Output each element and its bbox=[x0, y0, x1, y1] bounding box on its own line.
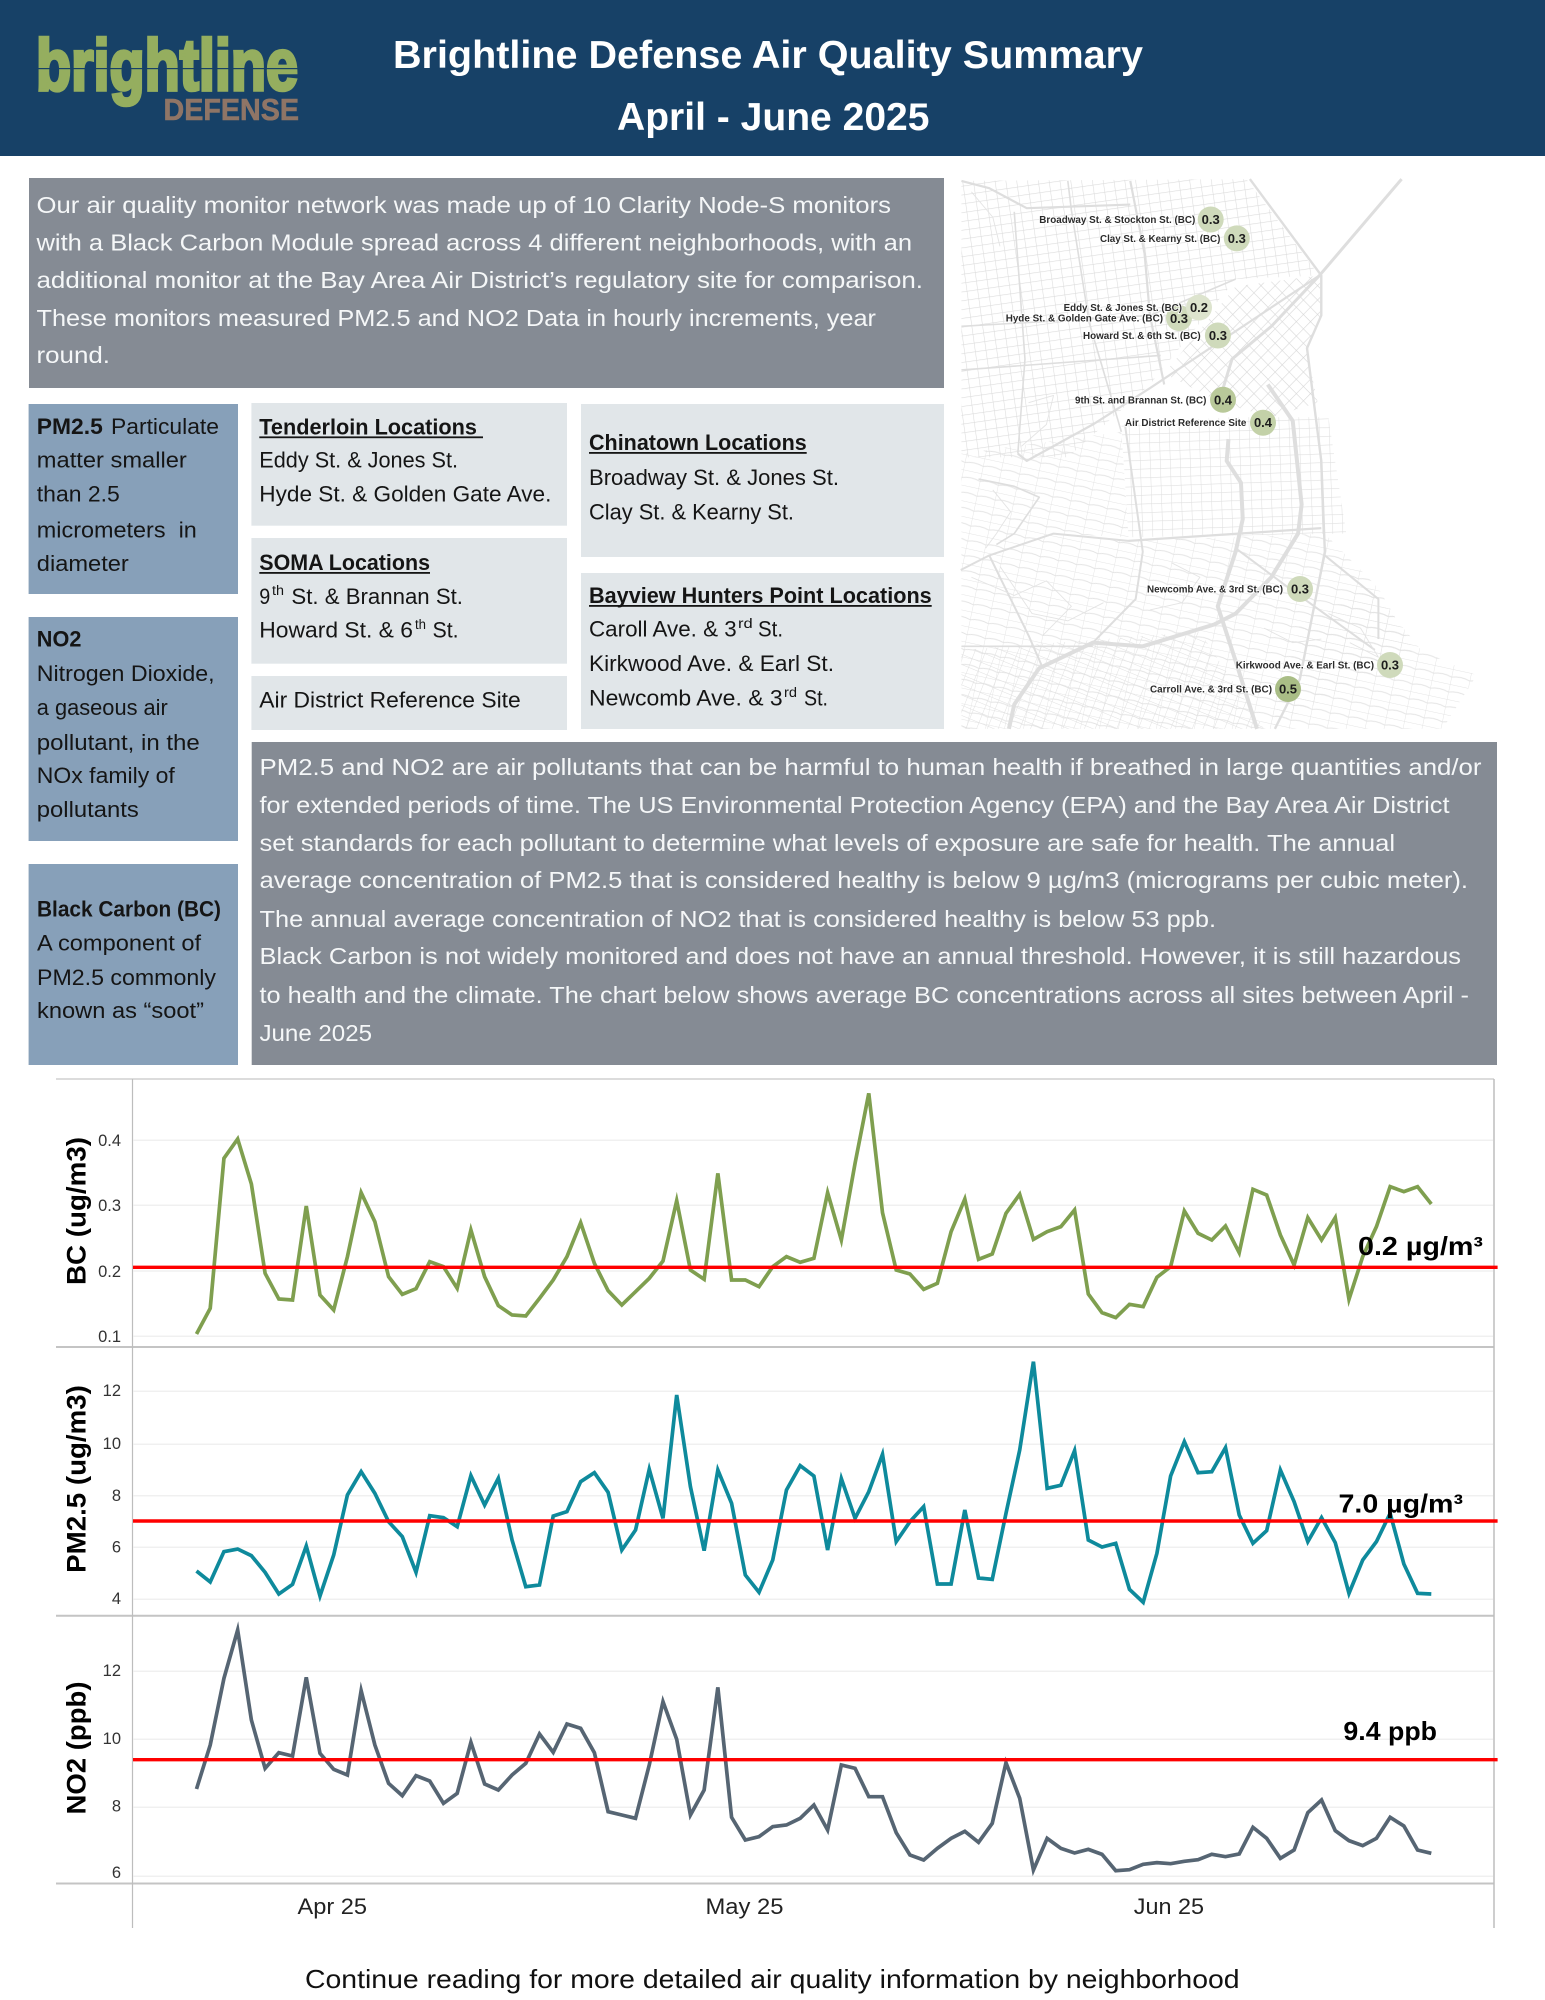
marker: Eddy: Eddy St. & Jones St. (BC) bbox=[1064, 302, 1182, 314]
street map base bbox=[961, 179, 1477, 729]
panel: PM2.5 definition: Particulate bbox=[111, 414, 219, 439]
panel: Black Carbon definition: PM2.5 commonly bbox=[37, 965, 217, 990]
panel: network intro: These monitors measured PM2.5 and NO2 Data in hourly increments, year bbox=[36, 305, 876, 331]
x axis labels: Jun 25 bbox=[1134, 1894, 1204, 1919]
panel: SOMA locations: St. & Brannan St. bbox=[291, 584, 463, 609]
y axis ticks: PM2.5: 8 bbox=[112, 1487, 121, 1505]
callout: 7.0 average: 7.0 µg/m³ bbox=[1338, 1489, 1463, 1519]
callout: 0.2 average: 0.2 µg/m³ bbox=[1358, 1231, 1483, 1261]
panel: Black Carbon definition: A component of bbox=[37, 931, 202, 956]
reference line: BC average bbox=[133, 1266, 1498, 1269]
marker: Kirkwood bbox=[1236, 652, 1403, 678]
panel: NO2 definition: pollutant, in the bbox=[37, 730, 200, 755]
panel: SOMA locations: 9 bbox=[259, 584, 270, 609]
y axis ticks: BC: 0.3 bbox=[98, 1197, 121, 1215]
x axis labels: May 25 bbox=[706, 1894, 784, 1919]
y axis ticks: NO2: 6 bbox=[112, 1864, 121, 1882]
panel: PM2.5 definition: PM2.5 bbox=[37, 414, 103, 439]
panel: SOMA locations: SOMA Locations bbox=[259, 550, 430, 575]
marker: 9th and Brannan: 0.4 bbox=[1214, 392, 1233, 407]
map: San Francisco monitor locations bbox=[961, 179, 1477, 729]
marker: Clay: 0.3 bbox=[1228, 231, 1246, 246]
chart frame and axes bbox=[56, 1079, 1494, 1928]
marker: Air District Reference Site bbox=[1125, 410, 1276, 436]
y axis ticks: PM2.5: 6 bbox=[112, 1539, 121, 1557]
panel: Bayview Hunters Point locations: Kirkwood Ave. & Earl St. bbox=[589, 651, 834, 676]
panel: Bayview Hunters Point locations bbox=[581, 573, 944, 729]
marker: Hyde bbox=[1006, 305, 1192, 331]
title: Brightline Defense Air Quality Summary bbox=[393, 34, 1144, 77]
panel: NO2 definition: a gaseous air bbox=[37, 695, 168, 720]
marker: Newcomb: Newcomb Ave. & 3rd St. (BC) bbox=[1147, 584, 1283, 596]
panel: NO2 definition: Nitrogen Dioxide, bbox=[37, 661, 215, 686]
y axis ticks: BC: 0.1 bbox=[98, 1328, 121, 1346]
panel: Chinatown locations bbox=[581, 404, 944, 557]
y axis ticks: PM2.5 bbox=[103, 1382, 121, 1608]
panel: PM2.5 definition: than 2.5 bbox=[37, 482, 120, 507]
y axis title: PM2.5: PM2.5 (ug/m3) bbox=[62, 1385, 92, 1573]
panel: network intro: Our air quality monitor network was made up of 10 Clarity Node-S monitors bbox=[36, 192, 891, 218]
panel: Bayview Hunters Point locations: Bayview Hunters Point Locations bbox=[589, 583, 932, 608]
y axis ticks: PM2.5: 12 bbox=[103, 1382, 121, 1400]
panel: Black Carbon definition: known as “soot” bbox=[37, 998, 204, 1023]
marker: Broadway: 0.3 bbox=[1202, 212, 1220, 227]
panel: SOMA locations: Howard St. & 6 bbox=[259, 618, 413, 643]
panel: Air District reference site bbox=[251, 676, 567, 730]
panel: Black Carbon definition: Black Carbon (BC) bbox=[37, 897, 221, 922]
panel: Chinatown locations: Chinatown Locations bbox=[589, 430, 807, 455]
marker: Air District Reference Site: 0.4 bbox=[1254, 415, 1273, 430]
marker: Howard: Howard St. & 6th St. (BC) bbox=[1083, 330, 1201, 342]
marker: Broadway: Broadway St. & Stockton St. (BC) bbox=[1039, 214, 1195, 226]
marker: Hyde: 0.3 bbox=[1170, 311, 1188, 326]
panel: health standards explanation: for extended periods of time. The US Environmental Protection Agency (EPA) and the Bay Area Air District bbox=[260, 792, 1450, 818]
y axis ticks: BC: 0.2 bbox=[98, 1263, 121, 1281]
panel: SOMA locations: St. bbox=[432, 618, 459, 643]
marker: Newcomb bbox=[1147, 576, 1313, 602]
marker: Carroll: Carroll Ave. & 3rd St. (BC) bbox=[1150, 684, 1272, 696]
panel: Bayview Hunters Point locations: rd bbox=[784, 685, 797, 700]
panel: NO2 definition: pollutants bbox=[37, 797, 139, 822]
header banner bbox=[0, 0, 1545, 156]
panel: health standards explanation: The annual average concentration of NO2 that is considered healthy is below 53 ppb. bbox=[260, 906, 1216, 932]
logo: brightline defense: DEFENSE bbox=[164, 92, 299, 127]
chart: Black Carbon bbox=[62, 1093, 1498, 1346]
chart: NO2 bbox=[62, 1630, 1498, 1882]
panel: Bayview Hunters Point locations: St. bbox=[804, 686, 828, 711]
panel: Chinatown locations: Broadway St. & Jones St. bbox=[589, 465, 839, 490]
panel: Tenderloin locations bbox=[251, 403, 567, 526]
x axis labels bbox=[298, 1894, 1204, 1919]
y axis ticks: BC bbox=[98, 1132, 121, 1346]
title bbox=[393, 34, 1144, 139]
marker: Eddy: 0.2 bbox=[1190, 300, 1208, 315]
panel: health standards explanation: June 2025 bbox=[260, 1020, 372, 1046]
panel: SOMA locations: th bbox=[415, 617, 426, 632]
marker: Kirkwood: 0.3 bbox=[1381, 658, 1399, 672]
panel: health standards explanation bbox=[252, 742, 1497, 1065]
panel: Bayview Hunters Point locations: St. bbox=[758, 617, 783, 642]
panel: Black Carbon definition bbox=[29, 864, 238, 1065]
logo: brightline defense bbox=[35, 26, 299, 127]
logo: brightline defense: brightline bbox=[36, 26, 298, 106]
panel: Tenderloin locations: Hyde St. & Golden Gate Ave. bbox=[259, 482, 551, 507]
panel: health standards explanation: Black Carbon is not widely monitored and does not have an annual threshold. However, it is still hazardous bbox=[260, 943, 1461, 969]
panel: NO2 definition: NOx family of bbox=[37, 763, 176, 788]
panel: SOMA locations bbox=[251, 538, 567, 664]
panel: Tenderloin locations: Tenderloin Locations bbox=[259, 414, 477, 439]
marker: Hyde: Hyde St. & Golden Gate Ave. (BC) bbox=[1006, 312, 1163, 324]
panel: NO2 definition: NO2 bbox=[37, 627, 81, 652]
y axis ticks: NO2: 10 bbox=[103, 1730, 121, 1748]
marker: Eddy bbox=[1064, 294, 1212, 320]
panel: health standards explanation: PM2.5 and NO2 are air pollutants that can be harmful to human health if breathed in large quantities and/or bbox=[260, 754, 1482, 780]
marker: Newcomb: 0.3 bbox=[1291, 582, 1309, 596]
footer note: Continue reading for more detailed air quality information by neighborhood bbox=[305, 1964, 1240, 1994]
marker: Howard bbox=[1083, 322, 1231, 348]
y axis ticks: NO2: 8 bbox=[112, 1798, 121, 1816]
callout: 9.4 average: 9.4 ppb bbox=[1343, 1716, 1437, 1746]
y axis title: NO2: NO2 (ppb) bbox=[62, 1682, 92, 1814]
marker: Air District Reference Site: Air District Reference Site bbox=[1125, 417, 1247, 429]
panel: PM2.5 definition: diameter bbox=[37, 551, 129, 576]
line series: NO2 bbox=[196, 1630, 1431, 1871]
y axis ticks: PM2.5: 4 bbox=[112, 1590, 121, 1608]
panel: NO2 definition bbox=[29, 617, 238, 841]
marker: 9th and Brannan bbox=[1075, 387, 1236, 413]
panel: Tenderloin locations: Eddy St. & Jones St. bbox=[259, 448, 458, 473]
title: April - June 2025 bbox=[617, 96, 930, 139]
panel: network intro: round. bbox=[36, 342, 110, 368]
marker: Howard: 0.3 bbox=[1209, 328, 1227, 343]
x axis labels: Apr 25 bbox=[298, 1894, 367, 1919]
line series: BC bbox=[196, 1093, 1431, 1334]
y axis title: BC: BC (ug/m3) bbox=[62, 1137, 92, 1285]
panel: PM2.5 definition bbox=[29, 404, 238, 594]
marker: Kirkwood: Kirkwood Ave. & Earl St. (BC) bbox=[1236, 660, 1374, 672]
panel: Bayview Hunters Point locations: rd bbox=[738, 616, 753, 631]
panel: network intro bbox=[29, 178, 944, 388]
y axis ticks: PM2.5: 10 bbox=[103, 1435, 121, 1453]
panel: health standards explanation: to health and the climate. The chart below shows average BC concentrations across all sites between April - bbox=[260, 982, 1469, 1008]
panel: network intro: additional monitor at the Bay Area Air District’s regulatory site for comparison. bbox=[36, 267, 923, 293]
panel: health standards explanation: average concentration of PM2.5 that is considered healthy is below 9 µg/m3 (micrograms per cubic meter). bbox=[260, 867, 1468, 893]
panel: Chinatown locations: Clay St. & Kearny St. bbox=[589, 499, 794, 524]
marker: Carroll: 0.5 bbox=[1279, 682, 1297, 696]
panel: PM2.5 definition: matter smaller bbox=[37, 448, 187, 473]
y axis ticks: NO2: 12 bbox=[103, 1662, 121, 1680]
line series: PM2.5 bbox=[196, 1362, 1431, 1602]
reference line: NO2 average bbox=[133, 1758, 1498, 1761]
y axis ticks: NO2 bbox=[103, 1662, 121, 1882]
panel: SOMA locations: th bbox=[272, 583, 284, 598]
marker: Clay bbox=[1100, 225, 1250, 251]
marker: Clay: Clay St. & Kearny St. (BC) bbox=[1100, 233, 1220, 245]
panel: Bayview Hunters Point locations: Newcomb Ave. & 3 bbox=[589, 686, 783, 711]
reference line: PM2.5 average bbox=[133, 1519, 1498, 1523]
marker: 9th and Brannan: 9th St. and Brannan St. (BC) bbox=[1075, 394, 1206, 406]
marker: Carroll bbox=[1150, 676, 1301, 702]
panel: Bayview Hunters Point locations: Caroll Ave. & 3 bbox=[589, 617, 737, 642]
panel: network intro: with a Black Carbon Module spread across 4 different neighborhoods, with an bbox=[35, 230, 912, 256]
panel: PM2.5 definition: micrometers in bbox=[37, 517, 197, 542]
chart: PM2.5 bbox=[62, 1362, 1498, 1608]
panel: Air District reference site: Air District Reference Site bbox=[259, 688, 521, 713]
y axis ticks: BC: 0.4 bbox=[98, 1132, 121, 1150]
panel: health standards explanation: set standards for each pollutant to determine what levels of exposure are safe for health. The annual bbox=[260, 830, 1395, 856]
marker: Broadway bbox=[1039, 206, 1224, 232]
